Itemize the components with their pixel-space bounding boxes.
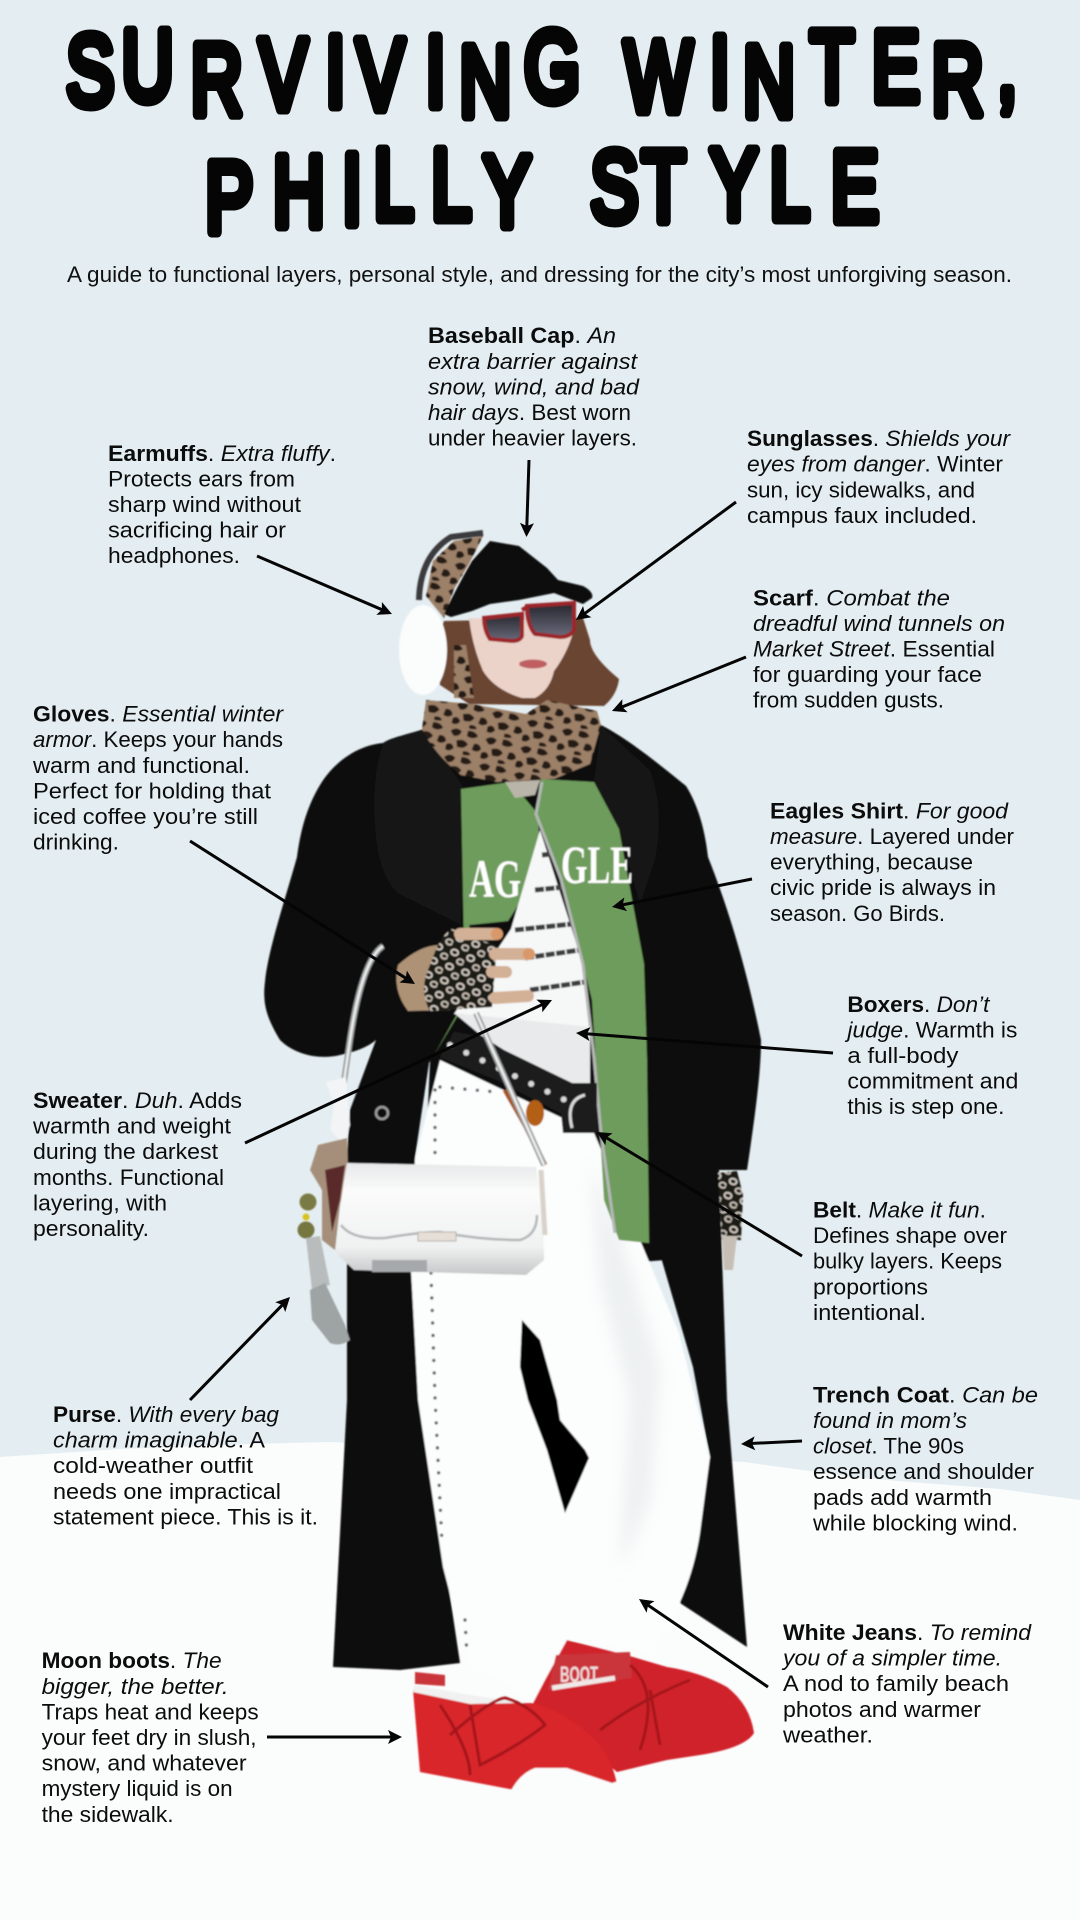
- text: boxers: Boxers. Don’t: [847, 992, 990, 1017]
- snowy ground: [0, 1442, 1080, 1920]
- shirt piping: [536, 782, 615, 1233]
- text: earmuffs: [108, 441, 336, 568]
- text: boxers: [844, 992, 1018, 1119]
- text: white jeans: [781, 1620, 1032, 1747]
- eagles lettering: GLE: [561, 835, 633, 895]
- text: eagles shirt: Eagles Shirt . For good: [770, 798, 1009, 823]
- leopard ear flap: [454, 645, 474, 698]
- text: gloves: Gloves. Essential winter: [33, 702, 285, 727]
- text: sweater: Sweater. Duh. Adds: [33, 1088, 242, 1113]
- text: moon boots: Moon boots. The: [42, 1648, 222, 1673]
- text: sunglasses: [747, 426, 1012, 528]
- text: sunglasses: sun, icy sidewalks, and: [747, 477, 975, 502]
- text: trench coat: pads add warmth: [813, 1485, 992, 1510]
- right glove: [718, 1171, 743, 1270]
- text: sunglasses: campus faux included.: [747, 503, 977, 528]
- title: [66, 10, 1017, 254]
- text: earmuffs: headphones.: [108, 543, 240, 568]
- text: gloves: [32, 702, 285, 855]
- text: boxers: a full-body: [847, 1043, 958, 1068]
- jean stud lines: [431, 1087, 497, 1655]
- title: SURVIVING WINTER,: [66, 10, 1017, 138]
- text: purse: cold-weather outfit: [53, 1453, 253, 1478]
- text: sweater: personality.: [33, 1216, 149, 1241]
- sunglasses: [484, 603, 574, 641]
- arrow: belt: [600, 1134, 802, 1256]
- coat lapels: [374, 725, 659, 925]
- text: scarf: Market Street. Essential: [753, 636, 995, 662]
- arrow: trench coat: [745, 1441, 802, 1444]
- text: sunglasses: Sunglasses. Shields your: [747, 426, 1012, 451]
- earmuff: [399, 605, 447, 695]
- text: gloves: iced coffee you’re still: [33, 804, 258, 829]
- text: purse: Purse. With every bag: [53, 1402, 280, 1427]
- text: moon boots: the sidewalk.: [42, 1802, 174, 1827]
- text: earmuffs: Protects ears from: [108, 466, 295, 491]
- text: belt: Defines shape over: [813, 1223, 1007, 1248]
- white jeans: [411, 1060, 710, 1703]
- sweater with stripes: [454, 830, 592, 1030]
- arrow: earmuffs: [257, 556, 388, 612]
- text: boxers: this is step one.: [847, 1094, 1004, 1119]
- coat button: [376, 1107, 388, 1119]
- text: sweater: [32, 1088, 242, 1241]
- text: sweater: months. Functional: [33, 1165, 224, 1190]
- figure: woman in winter outfit: [264, 533, 800, 1830]
- text: belt: proportions: [813, 1274, 928, 1299]
- text: eagles shirt: everything, because: [770, 850, 973, 875]
- purse strap: [342, 946, 544, 1165]
- green shirt right panel: [536, 779, 649, 1243]
- text: purse: [53, 1402, 318, 1529]
- text: purse: charm imaginable . A: [53, 1428, 265, 1453]
- hair claw: [505, 1090, 545, 1165]
- text: trench coat: while blocking wind.: [812, 1510, 1018, 1535]
- text: boxers: judge. Warmth is: [844, 1017, 1017, 1042]
- text: trench coat: essence and shoulder: [813, 1459, 1034, 1484]
- eagles lettering: [469, 835, 633, 909]
- necklace: [505, 780, 540, 798]
- subtitle: A guide to functional layers, personal style, and dressing for the city’s most unforgiving season.: [67, 262, 1012, 287]
- text: gloves: warm and functional.: [32, 753, 250, 778]
- text: moon boots: mystery liquid is on: [42, 1776, 233, 1801]
- text: eagles shirt: [770, 798, 1014, 926]
- coat lining between legs: [520, 1320, 589, 1513]
- text: sunglasses: eyes from danger . Winter: [747, 452, 1003, 477]
- arrow: white jeans: [642, 1601, 768, 1687]
- text: scarf: Scarf. Combat the: [753, 585, 950, 610]
- arrow: eagles shirt: [616, 879, 752, 906]
- text: white jeans: photos and warmer: [783, 1697, 981, 1722]
- text: moon boots: bigger, the better.: [42, 1674, 229, 1699]
- face: [469, 618, 576, 698]
- text: baseball cap: [428, 323, 640, 451]
- jeans shading: [590, 1160, 660, 1570]
- text: boxers: commitment and: [847, 1069, 1018, 1094]
- arrow: moon boots: [267, 1736, 398, 1738]
- text: white jeans: A nod to family beach: [783, 1671, 1009, 1696]
- silver purse: [336, 1163, 545, 1275]
- earmuff band: [419, 533, 483, 600]
- text: baseball cap: Baseball Cap . An: [428, 323, 616, 348]
- text: white jeans: weather.: [782, 1722, 873, 1747]
- text: moon boots: Traps heat and keeps: [42, 1699, 259, 1724]
- hair: [437, 618, 619, 706]
- text: scarf: from sudden gusts.: [753, 688, 944, 713]
- trench coat: [264, 725, 761, 1670]
- text: moon boots: snow, and whatever: [42, 1751, 247, 1776]
- lips: [519, 660, 547, 668]
- text: scarf: dreadful wind tunnels on: [753, 611, 1005, 636]
- red moon boots: [413, 1640, 754, 1790]
- text: gloves: Perfect for holding that: [33, 778, 271, 803]
- arrow: scarf: [616, 657, 746, 710]
- text: baseball cap: extra barrier against: [428, 349, 638, 374]
- coat backing: [420, 780, 665, 1280]
- text: gloves: armor. Keeps your hands: [33, 727, 283, 752]
- text: belt: intentional.: [813, 1300, 926, 1325]
- text: scarf: for guarding your face: [753, 662, 982, 687]
- scarf: [422, 700, 601, 782]
- text: sweater: layering, with: [33, 1190, 167, 1215]
- text: earmuffs: Earmuffs. Extra fluffy.: [108, 441, 336, 466]
- text: eagles shirt: measure. Layered under: [770, 824, 1014, 849]
- text: baseball cap: snow, wind, and bad: [428, 374, 640, 399]
- bag charms: [298, 1077, 350, 1344]
- text: sweater: warmth and weight: [32, 1114, 231, 1139]
- text: eagles shirt: civic pride is always in: [770, 875, 996, 900]
- arrow: boxers: [580, 1033, 833, 1053]
- text: belt: Belt. Make it fun.: [813, 1198, 986, 1222]
- eagles lettering: AG: [469, 849, 521, 909]
- text: earmuffs: sharp wind without: [108, 492, 301, 517]
- text: belt: bulky layers. Keeps: [813, 1249, 1002, 1274]
- leopard cap band: [426, 536, 483, 618]
- title: PHILLY STYLE: [205, 129, 879, 254]
- left glove: [396, 928, 535, 1011]
- text: trench coat: Trench Coat . Can be: [813, 1382, 1038, 1407]
- arrow: baseball cap: [527, 460, 529, 533]
- text: gloves: drinking.: [33, 830, 119, 855]
- text: trench coat: found in mom’s: [813, 1408, 967, 1433]
- text: white jeans: you of a simpler time.: [781, 1646, 1002, 1671]
- snow mound at boots: [500, 1745, 800, 1830]
- text: moon boots: [42, 1648, 259, 1827]
- text: scarf: [753, 585, 1005, 713]
- text: trench coat: closet. The 90s: [813, 1434, 964, 1459]
- text: purse: needs one impractical: [53, 1479, 281, 1504]
- arrow: purse: [190, 1300, 287, 1400]
- text: baseball cap: hair days. Best worn: [428, 400, 631, 425]
- text: white jeans: White Jeans . To remind: [783, 1620, 1032, 1645]
- text: trench coat: [812, 1382, 1038, 1535]
- text: belt: [813, 1198, 1007, 1325]
- arrow: sweater: [245, 1002, 548, 1143]
- studded belt: [440, 1032, 597, 1133]
- text: baseball cap: under heavier layers.: [428, 426, 637, 451]
- arrow: sunglasses: [579, 502, 736, 618]
- text: moon boots: your feet dry in slush,: [42, 1725, 257, 1750]
- left green shirt panel: [433, 782, 540, 1057]
- baseball cap: [444, 541, 592, 617]
- text: earmuffs: sacrificing hair or: [108, 518, 286, 543]
- text: sweater: during the darkest: [33, 1139, 218, 1164]
- arrow: gloves: [190, 841, 412, 982]
- text: eagles shirt: season. Go Birds.: [770, 901, 945, 926]
- red moon boots: BOOT: [560, 1662, 598, 1687]
- text: purse: statement piece. This is it.: [53, 1504, 318, 1529]
- boxers waistband: [454, 1013, 590, 1083]
